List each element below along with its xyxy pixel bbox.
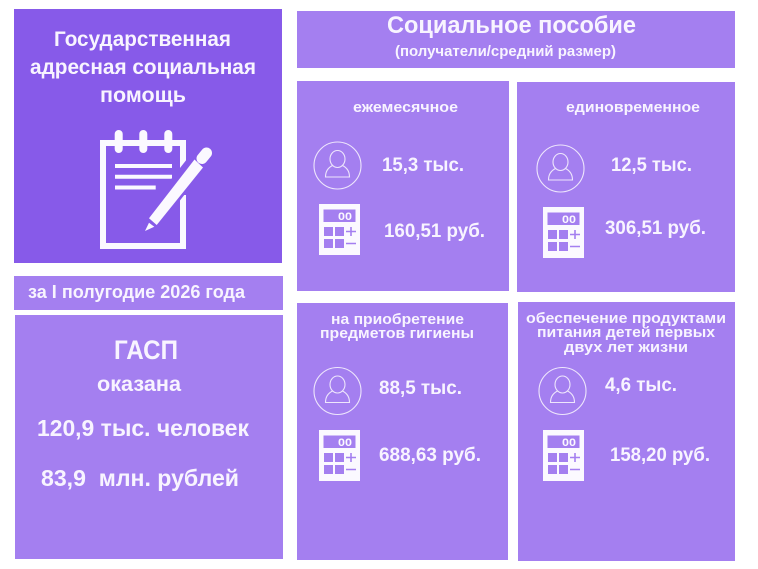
average amount: 306,51 руб.: [605, 218, 706, 239]
card heading: обеспечение продуктами: [526, 310, 726, 327]
average amount: 160,51 руб.: [384, 221, 485, 242]
heading: GASP: ГАСП: [114, 335, 178, 365]
stat: people: 120,9 тыс. человек: [37, 415, 249, 441]
heading: state social assistance: адресная социальная: [30, 56, 256, 79]
icon: person: [314, 142, 361, 189]
card heading: двух лет жизни: [564, 339, 688, 356]
stat: rubles: 83,9 млн. рублей: [41, 465, 239, 491]
period text: за I полугодие 2026 года: [28, 282, 246, 302]
recipients: 15,3 тыс.: [382, 155, 464, 176]
icon: notepad and pencil: [103, 134, 206, 246]
card heading: единовременное: [566, 99, 700, 116]
card heading: питания детей первых: [537, 324, 716, 341]
panel: GASP totals: [15, 315, 283, 559]
recipients: 12,5 тыс.: [611, 155, 692, 176]
panel: social benefit header: [297, 11, 735, 68]
average amount: 158,20 руб.: [610, 445, 710, 466]
icon: calculator: [543, 430, 584, 481]
card heading: ежемесячное: [353, 99, 458, 116]
icon: person: [314, 368, 361, 414]
panel: title: [14, 9, 282, 263]
icon: calculator: [319, 204, 360, 255]
icon: calculator: 00: [338, 437, 352, 449]
card heading: предметов гигиены: [320, 325, 474, 342]
icon: calculator: 00: [562, 214, 576, 226]
icon: calculator: 00: [562, 437, 576, 449]
heading: social benefit: Социальное пособие: [387, 12, 636, 39]
icon: calculator: [543, 207, 584, 258]
panel: one-time: [517, 82, 735, 292]
panel: hygiene items: [297, 303, 508, 560]
heading: state social assistance: Государственная: [54, 28, 231, 51]
icon: person: [537, 145, 584, 192]
recipients: 4,6 тыс.: [605, 375, 677, 396]
subheading: (получатели/средний размер): [395, 43, 616, 60]
heading: state social assistance: помощь: [100, 84, 186, 107]
icon: calculator: [319, 430, 360, 481]
icon: calculator: 00: [338, 211, 352, 223]
label: provided: оказана: [97, 373, 181, 396]
panel: period: [14, 276, 283, 310]
panel: monthly: [297, 81, 509, 291]
average amount: 688,63 руб.: [379, 445, 481, 466]
card heading: [526, 310, 726, 356]
card heading: [320, 311, 474, 342]
heading: state social assistance: [30, 28, 256, 107]
card heading: на приобретение: [331, 311, 464, 328]
icon: person: [539, 368, 586, 414]
recipients: 88,5 тыс.: [379, 378, 462, 399]
panel: food for infants: [518, 302, 735, 561]
